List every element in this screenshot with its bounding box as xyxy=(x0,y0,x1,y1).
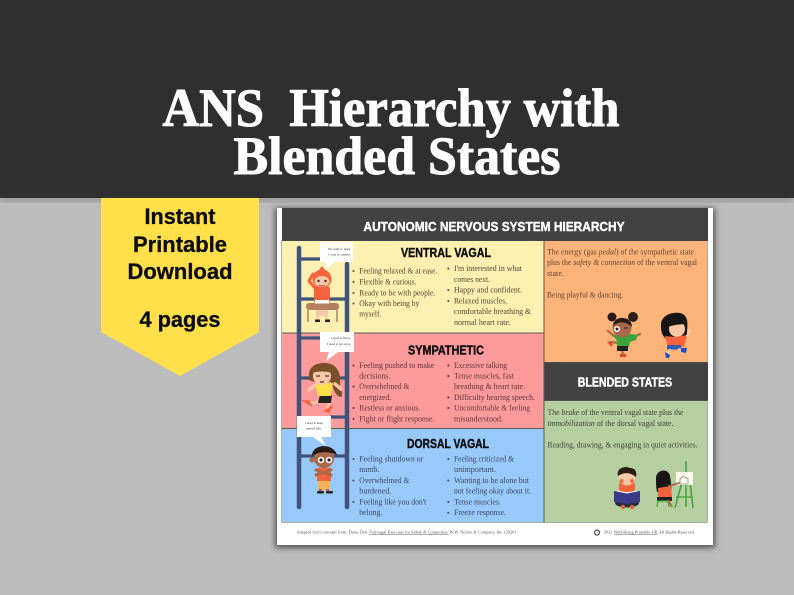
list: sympathetic right: Tense muscles, fast xyxy=(454,372,515,380)
character: boy reading xyxy=(614,467,640,509)
list: ventral left: myself. xyxy=(359,310,381,318)
heading: sympathetic: SYMPATHETIC xyxy=(408,342,485,358)
list: dorsal left: belong. xyxy=(359,508,382,517)
speech bubble: dorsal: myself safe. xyxy=(306,426,322,430)
list: ventral right: comes next. xyxy=(454,275,490,284)
list: ventral right: comfortable breathing & xyxy=(454,307,531,316)
list: dorsal left: numb. xyxy=(359,465,379,474)
speech bubble: sympathetic: I need to get away. xyxy=(327,342,351,346)
list: sympathetic left: Overwhelmed & xyxy=(359,382,410,391)
worksheet page xyxy=(275,208,715,548)
list: sympathetic right: breathing & heart rate. xyxy=(454,382,525,391)
text: sympathetic plus ventral: The energy (gas pedal) of the sympathetic state xyxy=(547,248,694,256)
list: dorsal left xyxy=(352,454,427,517)
list: dorsal left: Overwhelmed & xyxy=(359,476,410,485)
character: girl at desk xyxy=(306,266,339,322)
panel: ventral vagal xyxy=(282,241,544,332)
text: ventral plus dorsal: immobilization of the dorsal vagal state. xyxy=(548,419,674,428)
list: dorsal right: Freeze response. xyxy=(454,508,506,517)
character: arms-crossed boy xyxy=(310,446,337,494)
list: ventral left: Flexible & curious. xyxy=(359,278,416,286)
speech bubble: ventral: I want to connect. xyxy=(328,252,351,256)
character: dancing girl xyxy=(607,312,640,357)
list: ventral left: Feeling relaxed & at ease. xyxy=(359,266,437,276)
list: dorsal right: not feeling okay about it. xyxy=(454,486,531,496)
list: dorsal right: Tense muscles. xyxy=(454,498,501,506)
text: ventral plus dorsal xyxy=(548,408,698,450)
list: sympathetic right: misunderstood. xyxy=(454,414,503,424)
badge: instant printable download: Instant xyxy=(144,204,216,229)
list: dorsal right: unimportant. xyxy=(454,465,496,474)
speech bubble: sympathetic xyxy=(320,332,354,361)
footer citation: Adapted from concepts from: Dana, Deb. Polyvagal Exercises for Safety & Connection. W.W. Norton & Company, Inc. (2020) xyxy=(297,530,516,536)
page header: AUTONOMIC NERVOUS SYSTEM HIERARCHY xyxy=(364,219,625,234)
list: ventral left: Okay with being by xyxy=(359,299,420,308)
speech bubble: sympathetic: I need to move. xyxy=(331,336,351,340)
top title band xyxy=(0,0,794,202)
character: running girl xyxy=(304,363,342,412)
list: ventral right: Relaxed muscles, xyxy=(454,296,507,306)
ladder xyxy=(299,248,347,507)
badge: instant printable download: 4 pages xyxy=(140,307,220,332)
list: ventral left xyxy=(352,266,437,318)
speech bubble: ventral: I'm ready to learn. xyxy=(328,247,351,251)
list: ventral right: normal heart rate. xyxy=(454,318,511,327)
list: sympathetic left xyxy=(352,361,435,424)
text: sympathetic plus ventral: plus the safety & connection of the ventral vagal xyxy=(547,258,698,267)
list: ventral right: Happy and confident. xyxy=(454,286,522,294)
speech bubble: dorsal: I need to keep xyxy=(305,421,323,425)
list: ventral right xyxy=(447,264,531,327)
panel: green blended state xyxy=(544,401,707,522)
blended states heading bar: BLENDED STATES xyxy=(578,375,672,390)
list: sympathetic right: Uncomfortable & feeling xyxy=(454,404,531,412)
list: dorsal left: Feeling shutdown or xyxy=(359,454,423,464)
speech bubble: dorsal xyxy=(297,416,331,446)
heading: dorsal vagal: DORSAL VAGAL xyxy=(407,436,489,451)
character: dancing girl with black hair xyxy=(661,313,690,358)
list: sympathetic right: Difficulty hearing speech. xyxy=(454,393,535,402)
title: ANS Hierarchy with xyxy=(162,78,620,138)
list: dorsal right: Wanting to be alone but xyxy=(454,476,530,485)
title xyxy=(162,78,620,186)
text: sympathetic plus ventral: Being playful & dancing. xyxy=(547,290,623,300)
footer copyright: 2021 Well-Being Printable UK All Rights Reserved. xyxy=(604,530,695,534)
list: sympathetic left: Feeling pushed to make xyxy=(359,361,435,370)
list: ventral right: I'm interested in what xyxy=(454,264,523,273)
title: Blended States xyxy=(234,126,560,186)
page header xyxy=(282,208,708,241)
list: dorsal left: burdened. xyxy=(359,486,391,496)
text: sympathetic plus ventral xyxy=(547,248,698,300)
list: dorsal left: Feeling like you don't xyxy=(359,498,427,506)
list: sympathetic left: decisions. xyxy=(359,372,390,380)
list: sympathetic left: Fight or flight response. xyxy=(359,414,434,424)
list: sympathetic right: Excessive talking xyxy=(454,361,508,370)
badge: instant printable download: Printable xyxy=(133,232,227,257)
panel: dorsal vagal xyxy=(282,429,544,522)
text: sympathetic plus ventral: state. xyxy=(547,269,564,278)
panel: orange blended state xyxy=(544,241,707,362)
badge: instant printable download xyxy=(101,198,259,376)
blended states heading bar xyxy=(544,362,708,400)
heading: ventral vagal: VENTRAL VAGAL xyxy=(401,245,491,260)
list: sympathetic left: energized. xyxy=(359,393,391,402)
badge: instant printable download: Download xyxy=(128,259,232,284)
character: girl painting at easel xyxy=(656,461,693,508)
text: ventral plus dorsal: Reading, drawing, & engaging in quiet activities. xyxy=(548,440,698,450)
list: dorsal right xyxy=(447,454,531,517)
list: sympathetic left: Restless or anxious. xyxy=(359,404,420,412)
list: dorsal right: Feeling criticized & xyxy=(454,454,514,464)
list: sympathetic right xyxy=(447,361,535,424)
speech bubble: ventral xyxy=(320,242,353,270)
list: ventral left: Ready to be with people. xyxy=(359,288,435,298)
panel: sympathetic xyxy=(282,334,544,428)
text: ventral plus dorsal: The brake of the ventral vagal state plus the xyxy=(548,408,684,417)
